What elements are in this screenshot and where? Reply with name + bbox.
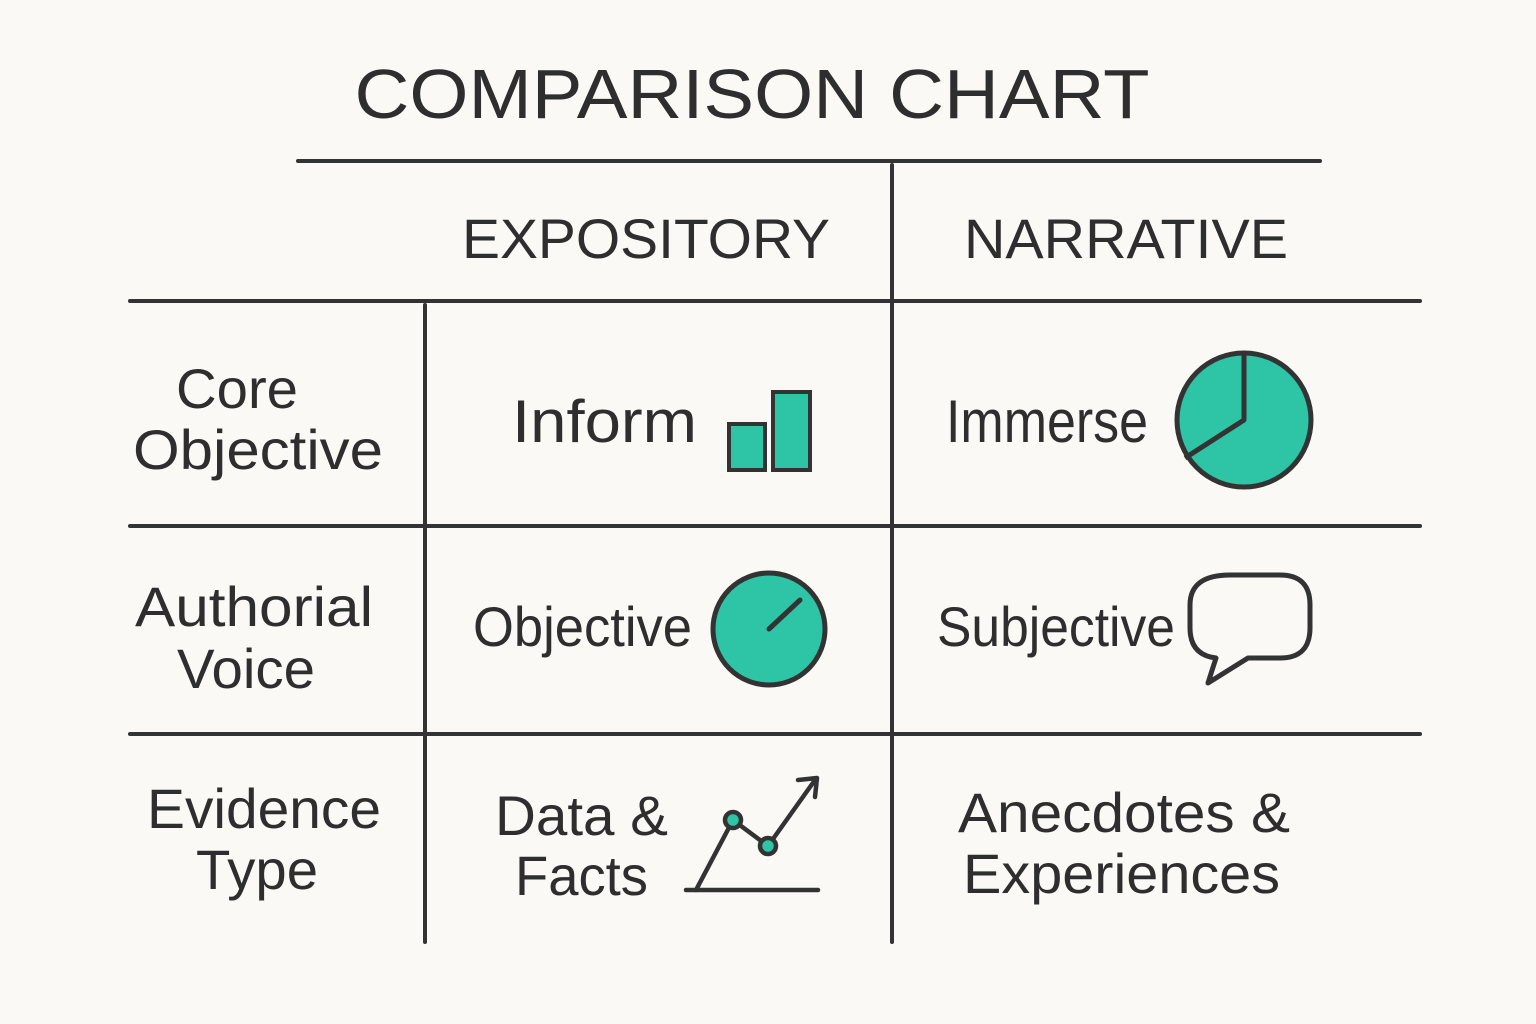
- text: objective: Objective: [473, 595, 692, 658]
- row label: evidence type: [147, 777, 381, 901]
- icon: bar chart: [729, 392, 810, 470]
- text: anecdotes & experiences: Experiences: [963, 842, 1280, 905]
- title: COMPARISON CHART: [354, 55, 1150, 133]
- row label: evidence type: Evidence: [147, 777, 381, 840]
- text: data & facts: [495, 784, 668, 907]
- row label: authorial voice: [135, 575, 373, 700]
- text: data & facts: Facts: [515, 844, 648, 907]
- text: subjective: Subjective: [937, 595, 1175, 658]
- icon: pie chart: [1177, 353, 1311, 487]
- row label: core objective: Core: [176, 357, 298, 420]
- row label: core objective: [133, 357, 383, 481]
- text: anecdotes & experiences: [958, 781, 1290, 905]
- text: inform: Inform: [512, 388, 697, 455]
- icon: gauge circle: [713, 573, 825, 685]
- icon: line chart: [686, 778, 818, 890]
- row label: core objective: Objective: [133, 418, 383, 481]
- row label: authorial voice: Authorial: [135, 575, 373, 638]
- text: immerse: Immerse: [946, 388, 1148, 455]
- icon: speech bubble: [1190, 575, 1310, 683]
- text: data & facts: Data &: [495, 784, 668, 847]
- header: narrative: NARRATIVE: [964, 207, 1288, 270]
- row label: evidence type: Type: [196, 838, 318, 901]
- row label: authorial voice: Voice: [177, 637, 315, 700]
- header: expository: EXPOSITORY: [462, 207, 830, 270]
- text: anecdotes & experiences: Anecdotes &: [958, 781, 1290, 844]
